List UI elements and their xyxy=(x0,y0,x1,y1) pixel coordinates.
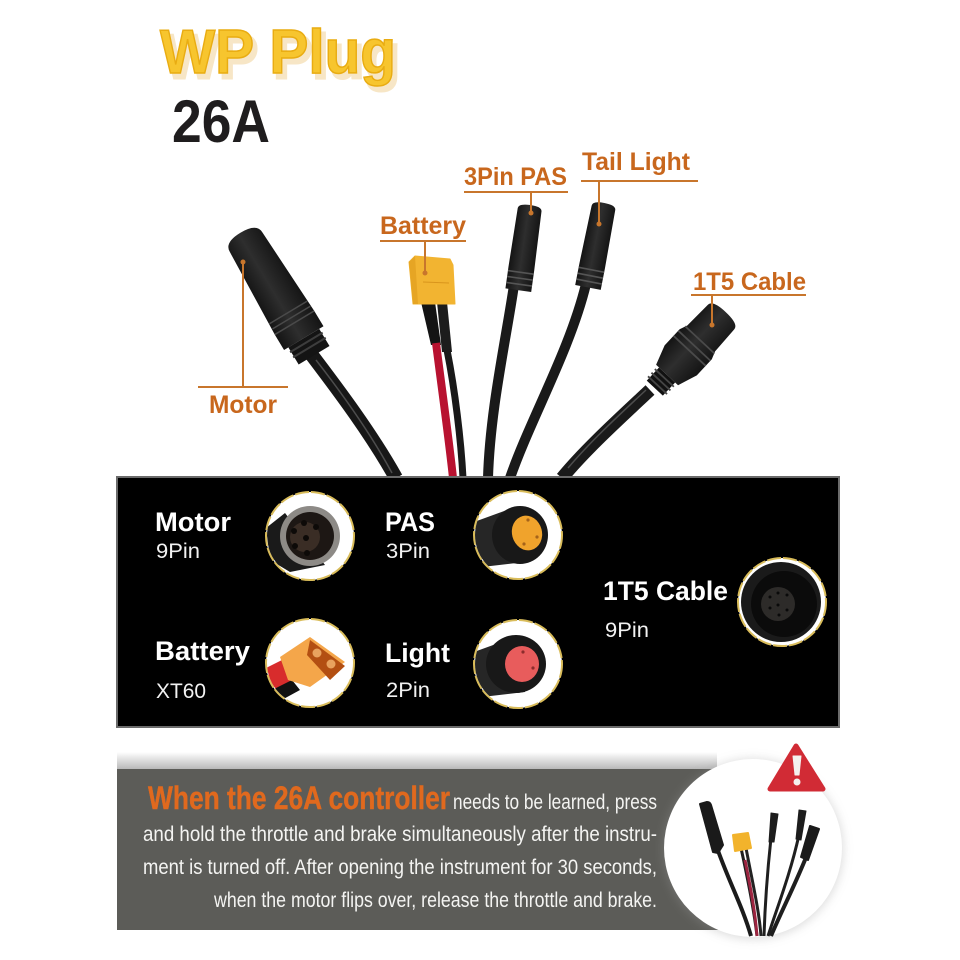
text: Motor 9Pin xyxy=(155,507,231,563)
icon: battery plug xyxy=(266,619,354,707)
text: Light 2Pin: 2Pin xyxy=(386,679,430,702)
label: Battery xyxy=(380,212,466,276)
text: Battery XT60 xyxy=(155,636,250,703)
text: 1T5 Cable 9Pin xyxy=(603,576,728,642)
icon: light plug xyxy=(474,620,562,708)
label: Tail Light: Tail Light xyxy=(582,148,691,176)
text: Motor 9Pin: Motor xyxy=(155,507,231,537)
text: instructions xyxy=(143,791,657,912)
label: Battery: Battery xyxy=(380,212,466,240)
connector: 1T5 cable xyxy=(562,297,742,478)
text: PAS 3Pin: PAS xyxy=(385,507,435,537)
label: 3Pin PAS: 3Pin PAS xyxy=(464,163,567,191)
text: instructions: when the motor flips over, release the throttle and brake. xyxy=(213,889,657,912)
icon: warning triangle xyxy=(770,746,823,789)
heading: When the 26A controller: When the 26A controller xyxy=(148,780,450,816)
text: instructions: needs to be learned, press xyxy=(453,791,657,814)
label: Motor: Motor xyxy=(209,391,277,419)
text: 1T5 Cable 9Pin: 9Pin xyxy=(605,619,649,642)
cable: motor xyxy=(308,350,396,478)
text: Battery XT60: Battery xyxy=(155,636,250,666)
text: Light 2Pin xyxy=(385,638,450,702)
text: PAS 3Pin: 3Pin xyxy=(386,540,430,563)
connector: tail light xyxy=(510,201,617,478)
icon: 1T5 plug xyxy=(738,558,826,646)
text: Motor 9Pin: 9Pin xyxy=(156,540,200,563)
icon: motor plug xyxy=(266,492,354,580)
text: Battery XT60: XT60 xyxy=(156,680,206,703)
subtitle: 26A: 26A xyxy=(172,88,270,155)
label: 1T5 Cable: 1T5 Cable xyxy=(693,268,806,296)
panel: connector types xyxy=(117,477,839,727)
connector: battery XT60 xyxy=(409,256,463,478)
connector: 3 pin PAS xyxy=(488,203,543,478)
label: 3Pin PAS xyxy=(464,163,568,216)
text: Light 2Pin: Light xyxy=(385,638,450,668)
text: instructions: ment is turned off. After opening the instrument for 30 seconds, xyxy=(143,856,657,879)
label: Tail Light xyxy=(581,148,698,226)
text: PAS 3Pin xyxy=(385,507,435,563)
label: Motor xyxy=(198,260,288,419)
text: 1T5 Cable 9Pin: 1T5 Cable xyxy=(603,576,728,606)
icon: PAS plug xyxy=(474,491,562,579)
connector: motor xyxy=(221,221,334,367)
cable harness photo xyxy=(221,201,742,478)
label: 1T5 Cable xyxy=(691,268,806,328)
title: WP Plug: WP Plug xyxy=(164,23,400,92)
photo circle: harness overview xyxy=(663,759,843,939)
panel: learning note xyxy=(117,752,737,930)
title: WP Plug: WP Plug xyxy=(160,18,396,87)
text: instructions: and hold the throttle and brake simultaneously after the instru- xyxy=(143,823,657,846)
